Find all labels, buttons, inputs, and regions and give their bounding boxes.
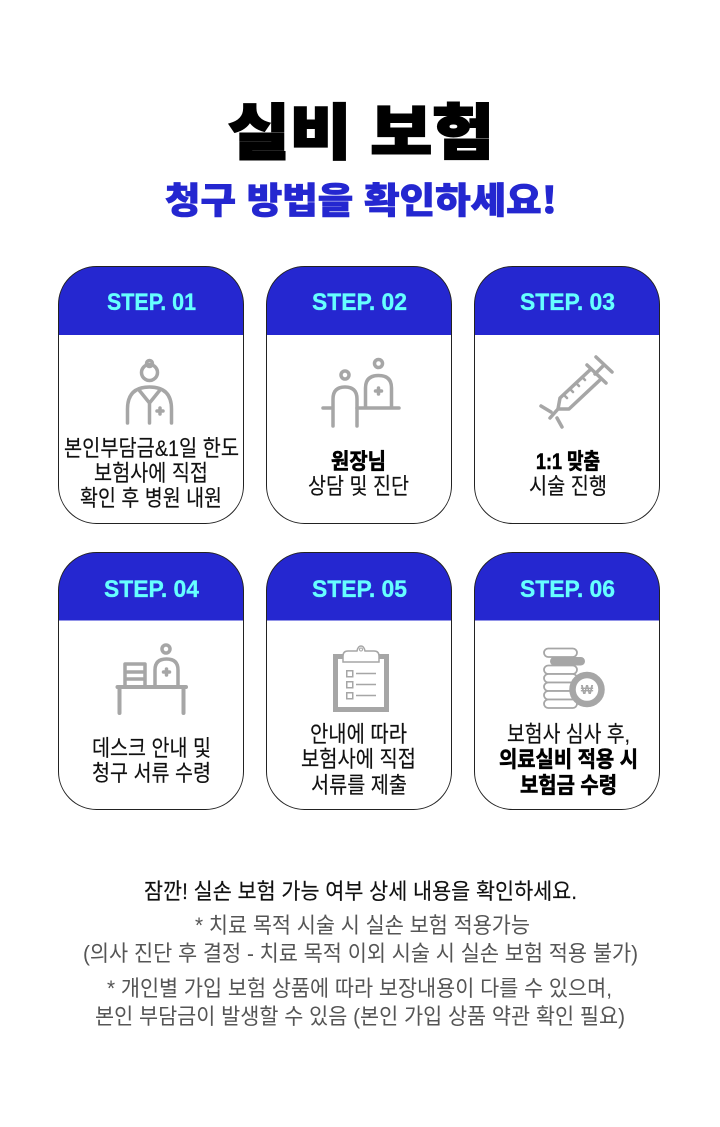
icon: coins: ₩ bbox=[581, 682, 594, 697]
note: individual coverage: * 개인별 가입 보험 상품에 따라 보장내용이 다를 수 있으며, bbox=[107, 976, 612, 1001]
icon: clipboard checklist bbox=[336, 646, 386, 710]
step 02 text bbox=[308, 449, 409, 499]
step 05 text: 안내에 따라 bbox=[310, 722, 407, 747]
step 03 label: STEP. 03 bbox=[520, 289, 615, 316]
icon: coins bbox=[544, 648, 602, 708]
step 03 header bbox=[474, 266, 660, 335]
step 06 text: 보험금 수령 bbox=[520, 773, 617, 798]
icon: nurse bbox=[128, 360, 172, 423]
step 02 text: 상담 및 진단 bbox=[308, 474, 409, 499]
step 05 text: 서류를 제출 bbox=[311, 773, 407, 798]
step 06 label: STEP. 06 bbox=[520, 576, 615, 603]
step 06 header bbox=[474, 552, 660, 620]
icon: doctor consultation bbox=[323, 360, 399, 426]
step 03 text bbox=[529, 449, 607, 499]
step 02 label: STEP. 02 bbox=[312, 289, 407, 316]
step 01 text bbox=[64, 436, 239, 511]
step 01 text: 확인 후 병원 내원 bbox=[80, 486, 222, 511]
panel: step 04 bbox=[58, 552, 244, 810]
step 05 label: STEP. 05 bbox=[312, 576, 407, 603]
notice heading: 잠깐! 실손 보험 가능 여부 상세 내용을 확인하세요. bbox=[144, 879, 577, 904]
step 06 text bbox=[499, 722, 638, 798]
title: 실비 보험 bbox=[228, 85, 494, 172]
step 04 text bbox=[92, 736, 211, 786]
step 03 text: 1:1 맞춤 bbox=[536, 449, 600, 474]
icon: syringe bbox=[541, 357, 612, 427]
note: treatment purpose: * 치료 목적 시술 시 실손 보험 적용가능 bbox=[195, 913, 530, 938]
step 01 label: STEP. 01 bbox=[107, 289, 196, 316]
step 05 text bbox=[301, 722, 416, 798]
panel: step 01 bbox=[58, 266, 244, 524]
note: individual coverage: 본인 부담금이 발생할 수 있음 (본인 가입 상품 약관 확인 필요) bbox=[95, 1004, 625, 1029]
icon: reception desk bbox=[118, 645, 186, 713]
step 03 text: 시술 진행 bbox=[529, 474, 607, 499]
step 04 text: 데스크 안내 및 bbox=[92, 736, 211, 761]
panel: step 03 bbox=[474, 266, 660, 524]
panel: step 02 bbox=[266, 266, 452, 524]
step 04 text: 청구 서류 수령 bbox=[92, 761, 211, 786]
step 01 text: 보험사에 직접 bbox=[94, 461, 208, 486]
step 04 header bbox=[58, 552, 244, 620]
step 04 label: STEP. 04 bbox=[104, 576, 200, 603]
step 05 text: 보험사에 직접 bbox=[301, 747, 416, 772]
step 01 text: 본인부담금&1일 한도 bbox=[64, 436, 239, 461]
panel: step 05 bbox=[266, 552, 452, 810]
subtitle: 청구 방법을 확인하세요! bbox=[165, 172, 557, 224]
step 06 text: 보험사 심사 후, bbox=[507, 722, 630, 747]
note: individual coverage bbox=[95, 976, 625, 1029]
step 02 header bbox=[266, 266, 452, 335]
step 05 header bbox=[266, 552, 452, 620]
step 02 text: 원장님 bbox=[331, 449, 386, 474]
panel: step 06 bbox=[474, 552, 660, 810]
note: treatment purpose: (의사 진단 후 결정 - 치료 목적 이외 시술 시 실손 보험 적용 불가) bbox=[83, 941, 638, 966]
step 01 header bbox=[58, 266, 244, 335]
step 06 text: 의료실비 적용 시 bbox=[499, 747, 638, 772]
note: treatment purpose bbox=[83, 913, 638, 966]
